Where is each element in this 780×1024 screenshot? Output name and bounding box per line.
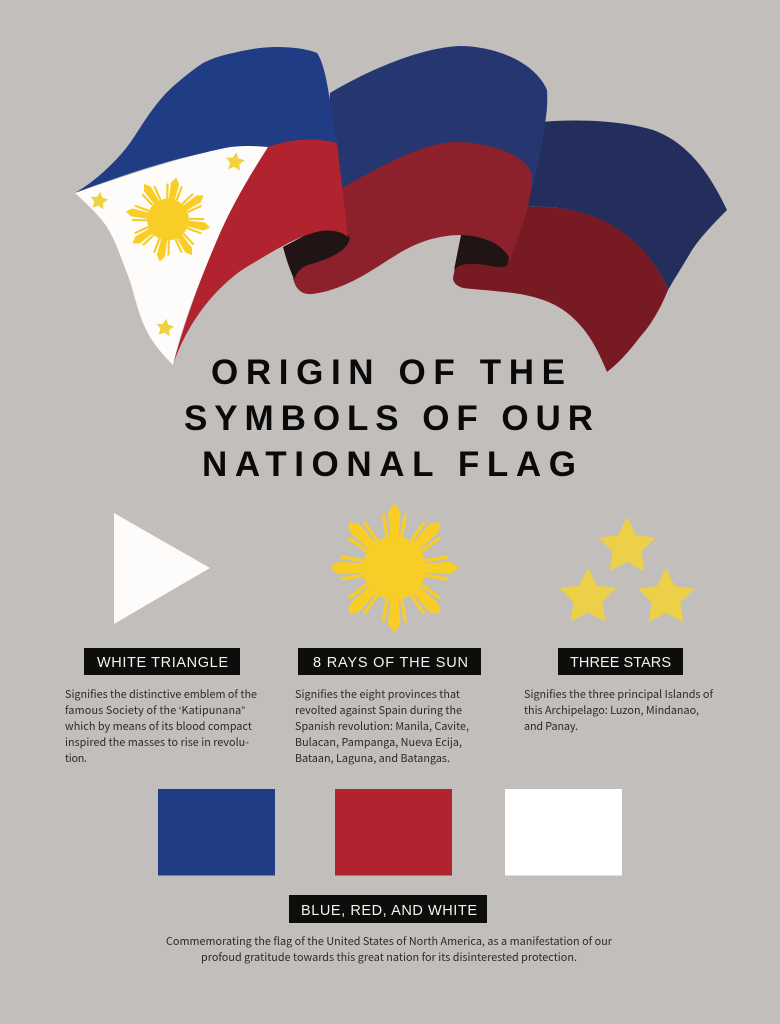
text: 8 rays description: Signifies the eight provinces that (295, 686, 460, 702)
text: three stars description: this Archipelago: Luzon, Mindanao, (524, 702, 699, 718)
waving Philippine flag (75, 46, 727, 372)
text: 8 rays description: Bataan, Laguna, and Batangas. (295, 750, 450, 766)
label: 8 rays of the sun: 8 RAYS OF THE SUN (313, 655, 468, 671)
text: white triangle description (65, 686, 257, 766)
label: 8 rays of the sun (298, 648, 481, 675)
swatch: white (505, 789, 622, 876)
label: three stars (558, 648, 683, 675)
label: blue, red, and white (289, 895, 487, 923)
text: white triangle description: which by means of its blood compact (65, 718, 252, 734)
label: white triangle (84, 648, 240, 675)
text: colours description: profoud gratitude towards this great nation for its disinterested protection. (201, 949, 577, 965)
title: ORIGIN OF THE (211, 353, 565, 392)
flag front: blue band (75, 47, 338, 193)
flag star: left (89, 191, 109, 210)
title: NATIONAL FLAG (202, 445, 576, 484)
text: 8 rays description (295, 686, 469, 766)
flag fold 3: dark underside (454, 230, 514, 270)
flag star: bottom (155, 318, 175, 337)
icon: sun with eight rays (329, 503, 459, 633)
text: white triangle description: Signifies the distinctive emblem of the (65, 686, 257, 702)
text: colours description: Commemorating the flag of the United States of North America, as a manifestation of our (166, 933, 613, 949)
swatch: red (335, 789, 452, 876)
text: 8 rays description: Bulacan, Pampanga, Nueva Ecija, (295, 734, 462, 750)
flag sun (118, 169, 218, 270)
flag fold 3: far red band (453, 207, 668, 372)
flag front: white triangle (75, 146, 268, 365)
label: white triangle: WHITE TRIANGLE (97, 655, 228, 671)
label: blue, red, and white: BLUE, RED, AND WHITE (301, 903, 477, 919)
title (184, 353, 593, 484)
text: three stars description: Signifies the three principal Islands of (524, 686, 713, 702)
text: white triangle description: inspired the masses to rise in revolu- (65, 734, 249, 750)
flag star: top right (225, 151, 246, 171)
title: SYMBOLS OF OUR (184, 399, 593, 438)
icon: white triangle (114, 513, 210, 624)
text: three stars description (524, 686, 713, 734)
text: white triangle description: famous Society of the ‘Katipunana” (65, 702, 245, 718)
icon: three stars (560, 517, 694, 622)
text: white triangle description: tion. (65, 750, 87, 766)
swatch: blue (158, 789, 275, 876)
flag fold 2: middle red band (293, 142, 532, 294)
flag fold 2: middle blue band (325, 46, 547, 190)
text: three stars description: and Panay. (524, 718, 578, 734)
flag fold 3: far blue band (520, 121, 727, 290)
text: 8 rays description: revolted against Spain during the (295, 702, 462, 718)
flag fold 1: dark underside (283, 222, 350, 279)
text: colours description (166, 933, 613, 965)
text: 8 rays description: Spanish revolution: Manila, Cavite, (295, 718, 469, 734)
flag front: red band (173, 140, 348, 365)
label: three stars: THREE STARS (570, 655, 671, 671)
